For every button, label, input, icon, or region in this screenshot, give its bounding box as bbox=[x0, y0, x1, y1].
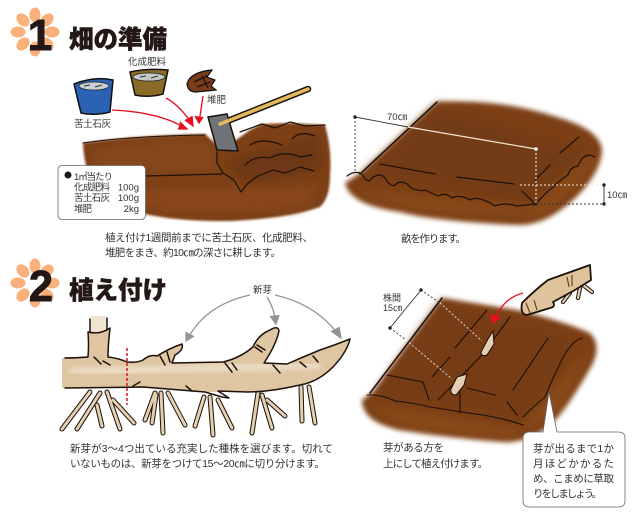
spacing dimension bbox=[388, 288, 482, 379]
stem top bbox=[91, 316, 106, 336]
callout: amounts per square metre: 100g bbox=[118, 182, 139, 194]
planted rhizomes bbox=[451, 331, 494, 395]
caption: step 1 left: 堆肥をまき、約10㎝の深さに耕します。 bbox=[105, 246, 281, 259]
callout: amounts per square metre bbox=[58, 166, 146, 220]
illustration: rhizome with new buds bbox=[62, 316, 350, 435]
label: 70 cm: 70㎝ bbox=[387, 112, 408, 123]
callout: amounts per square metre: 2kg bbox=[124, 204, 139, 215]
caption: step 1 left: 植え付け1週間前までに苦土石灰、化成肥料、 bbox=[105, 231, 313, 244]
cut line bbox=[126, 348, 128, 405]
caption: step 2 left: 新芽が3～4つ出ている充実した種株を選びます。切れて bbox=[70, 442, 333, 455]
caption: step 2 right: 上にして植え付けます。 bbox=[383, 457, 488, 470]
callout: weeding advice: め、こまめに草取 bbox=[533, 473, 614, 485]
section number 2 badge bbox=[10, 258, 60, 311]
roots bbox=[62, 387, 315, 435]
planting soil bbox=[362, 298, 597, 442]
icon: rhizome held above bed bbox=[522, 265, 592, 315]
label: new bud: 新芽 bbox=[253, 285, 272, 296]
callout: amounts per square metre: 堆肥 bbox=[74, 203, 92, 215]
arrow: into planting hole bbox=[490, 293, 523, 323]
illustration: tilling the soil bbox=[83, 89, 330, 221]
bed lines bbox=[367, 298, 582, 425]
icon: brown fertilizer bucket bbox=[130, 69, 168, 96]
section number 1 badge bbox=[10, 8, 60, 60]
label: plant spacing 15 cm bbox=[383, 292, 402, 313]
hoe bbox=[208, 89, 308, 151]
dimension lines bbox=[353, 115, 606, 206]
rhizome outline bbox=[65, 318, 350, 398]
illustration: planting in the bed bbox=[362, 288, 597, 442]
arrows: materials into soil bbox=[112, 96, 203, 129]
section number 1 badge: 1 bbox=[28, 11, 52, 60]
caption: step 2 right: 芽がある方を bbox=[383, 441, 444, 454]
caption: step 2 right bbox=[383, 441, 488, 470]
section number 2 badge: 2 bbox=[29, 262, 53, 311]
label: plant spacing 15 cm: 株間 bbox=[383, 292, 401, 303]
callout: weeding advice: 芽が出るまで1か bbox=[533, 442, 614, 455]
label: compost: 堆肥 bbox=[207, 94, 226, 106]
bed soil bbox=[345, 101, 602, 225]
illustration: raised bed with dimensions bbox=[345, 101, 606, 225]
soil crack lines bbox=[83, 122, 325, 192]
callout: amounts per square metre: 100g bbox=[118, 193, 139, 204]
caption: make a ridge: 畝を作ります。 bbox=[401, 232, 466, 245]
callout: amounts per square metre: 1㎡当たり bbox=[74, 171, 113, 183]
callout: weeding advice: 月ほどかかるた bbox=[533, 458, 614, 470]
icon: compost pile bbox=[187, 70, 216, 92]
rhizome body bbox=[62, 328, 350, 392]
arrows: new buds bbox=[186, 295, 341, 341]
label: 10 cm: 10㎝ bbox=[607, 190, 628, 201]
title: planting: 植え付け bbox=[69, 277, 167, 305]
soil mound bbox=[83, 123, 330, 221]
callout: amounts per square metre: 化成肥料 bbox=[74, 182, 110, 194]
label: magnesia lime: 苦土石灰 bbox=[74, 118, 111, 130]
callout: weeding advice bbox=[523, 392, 625, 507]
label: plant spacing 15 cm: 15㎝ bbox=[383, 303, 402, 313]
bed outlines bbox=[347, 102, 595, 206]
caption: step 2 left bbox=[70, 442, 333, 470]
caption: step 2 left: いないものは、新芽をつけて15～20㎝に切り分けます。 bbox=[70, 458, 325, 470]
caption: step 1 left bbox=[105, 231, 313, 259]
label: chemical fertilizer: 化成肥料 bbox=[128, 56, 166, 68]
callout: amounts per square metre: 苦土石灰 bbox=[74, 192, 110, 204]
title: field preparation: 畑の準備 bbox=[69, 26, 167, 54]
callout: weeding advice: りをしましょう。 bbox=[533, 488, 602, 500]
icon: blue lime bucket bbox=[74, 79, 113, 114]
